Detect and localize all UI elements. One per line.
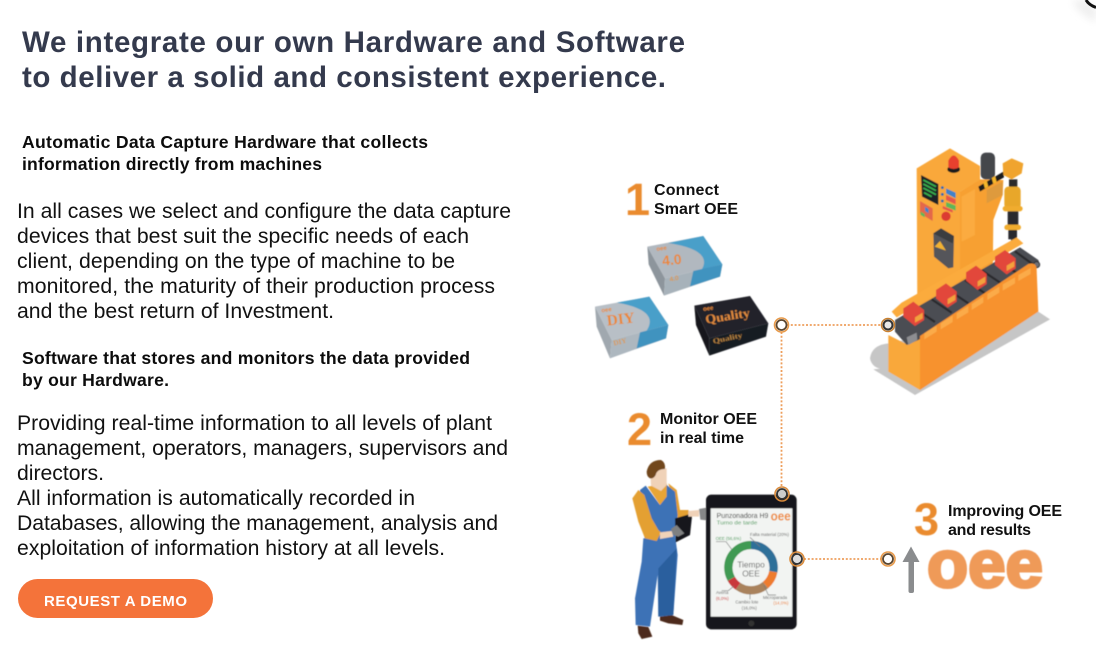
chart labels: Microparada — [763, 595, 788, 600]
text block: software description: directors. — [17, 462, 104, 485]
box: Quality: Quality — [712, 330, 743, 346]
subheading: software: by our Hardware. — [22, 370, 169, 390]
button: request a demo — [18, 579, 213, 618]
step 2 label — [627, 404, 757, 455]
text block: hardware description: In all cases we select and configure the data capture — [17, 200, 511, 223]
step 2 label: in real time — [660, 430, 744, 447]
chart labels: (14,0%) — [773, 601, 789, 606]
node: results — [881, 552, 895, 566]
control screen — [921, 175, 938, 205]
chart labels: (16,0%) — [742, 606, 757, 611]
tablet header: Turno de tarde — [717, 521, 757, 527]
box: DIY: oee — [601, 307, 613, 314]
machine column — [917, 148, 1003, 310]
illustration: worker with tablet — [632, 460, 797, 639]
warning beacon — [947, 155, 960, 173]
box: 4.0: oee — [656, 246, 668, 253]
donut centre label: OEE — [742, 569, 760, 579]
node: machine — [882, 318, 894, 332]
donut centre label — [737, 560, 765, 579]
overalls — [640, 485, 678, 540]
icon: up arrow — [902, 546, 920, 593]
machine upper part — [917, 148, 1023, 310]
head — [650, 468, 667, 491]
subheading: hardware: information directly from machines — [22, 154, 322, 174]
text block: hardware description: monitored, the maturity of their production process — [17, 275, 495, 298]
step 1 label: Connect — [654, 182, 720, 199]
node: hardware junction — [774, 318, 788, 332]
shirt left arm — [632, 490, 661, 541]
worker — [632, 460, 707, 639]
chart labels: Cambio lote — [735, 600, 759, 605]
chart labels: (6,0%) — [716, 596, 729, 601]
connector lines — [782, 325, 882, 559]
logo: oee: oee — [927, 527, 1043, 601]
chart labels: Avería — [716, 590, 729, 595]
control buttons — [920, 186, 956, 221]
step 2 label: 2 — [627, 404, 652, 455]
title — [22, 26, 685, 94]
text block: software description: Providing real-time information to all levels of plant — [17, 412, 492, 435]
chart labels: Falta material (20%) — [750, 532, 790, 537]
node: tablet right — [790, 552, 804, 566]
text block: hardware description — [17, 200, 511, 323]
tablet header — [717, 510, 791, 527]
icon: product boxes — [595, 236, 768, 358]
machine shadow — [870, 312, 1050, 395]
red products — [903, 250, 1016, 326]
boots — [638, 615, 683, 639]
node: tablet top — [775, 487, 789, 501]
collar — [648, 483, 669, 505]
text block: software description: exploitation of information history at all levels. — [17, 537, 445, 560]
subheading: hardware: Automatic Data Capture Hardware that collects — [22, 132, 428, 152]
step 3 label — [914, 494, 1062, 545]
subheading: software: Software that stores and monitors the data provided — [22, 348, 470, 368]
button: request a demo: REQUEST A DEMO — [44, 593, 187, 610]
machine lower part — [870, 237, 1050, 395]
subheading: hardware — [22, 132, 428, 174]
step 1 label — [625, 174, 738, 225]
legs — [635, 535, 678, 627]
arm and tablet in hand — [660, 531, 673, 539]
electrical cabinet — [933, 228, 954, 268]
donut chart — [728, 545, 774, 590]
text block: hardware description: and the best return of Investment. — [17, 300, 334, 323]
box: Quality: Quality — [704, 306, 752, 327]
box: Quality — [694, 296, 768, 356]
step 1 label: Smart OEE — [654, 201, 738, 218]
chart labels — [716, 532, 790, 611]
text block: software description: management, operators, managers, supervisors and — [17, 437, 508, 460]
box: DIY: DIY — [606, 309, 636, 330]
conveyor belt — [895, 247, 1040, 345]
box: DIY — [595, 297, 668, 358]
box: 4.0: 4.0 — [669, 275, 680, 284]
corner page curl — [1072, 0, 1096, 22]
conveyor back rail — [892, 237, 1023, 317]
step 3 label: 3 — [914, 494, 939, 545]
tablet header: Punzonadora H9 — [717, 513, 768, 520]
chart labels: OEE (56,6%) — [716, 536, 742, 541]
subheading: software — [22, 348, 470, 390]
text block: hardware description: client, depending on the type of machine to be — [17, 250, 455, 273]
pneumatic arm — [978, 153, 1023, 249]
text block: software description — [17, 412, 508, 560]
donut centre label: Tiempo — [737, 560, 765, 570]
conveyor base left face — [888, 335, 920, 390]
box: 4.0: 4.0 — [661, 251, 683, 269]
text block: software description: All information is automatically recorded in — [17, 487, 415, 510]
box: Quality: oee — [703, 306, 714, 313]
step 1 label: 1 — [625, 174, 650, 225]
tablet — [706, 495, 797, 629]
title: We integrate our own Hardware and Software — [22, 26, 685, 59]
step 3 label: and results — [948, 522, 1031, 539]
text block: hardware description: devices that best suit the specific needs of each — [17, 225, 469, 248]
shirt right side — [668, 483, 690, 522]
text block: software description: Databases, allowing the management, analysis and — [17, 512, 498, 535]
box: 4.0 — [647, 236, 722, 296]
step 3 label: Improving OEE — [948, 503, 1062, 520]
step 2 label: Monitor OEE — [660, 411, 757, 428]
title: to deliver a solid and consistent experience. — [22, 61, 666, 94]
illustration: factory machine with conveyor — [870, 148, 1050, 395]
box: DIY: DIY — [612, 335, 628, 348]
tablet header: oee — [771, 510, 791, 524]
conveyor base front face — [920, 263, 1038, 390]
